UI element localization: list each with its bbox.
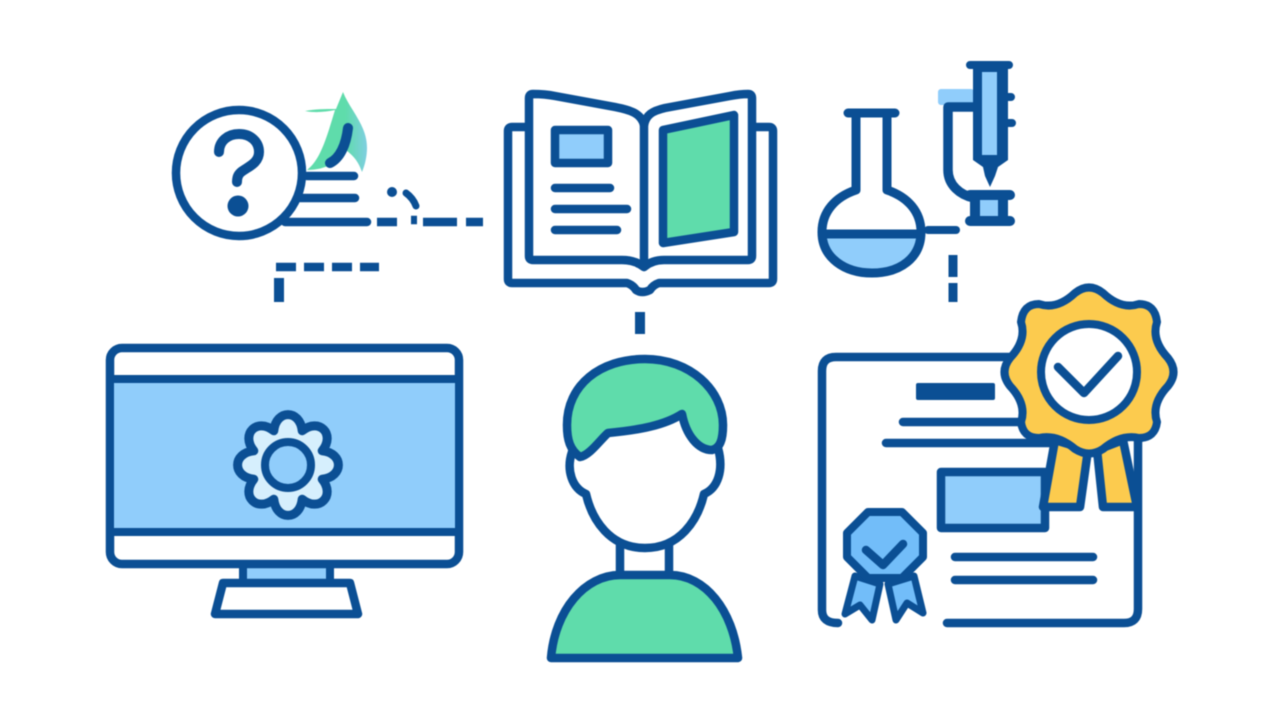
book pages [529,94,752,267]
icon: gear [238,415,338,515]
icon: flask [822,113,921,273]
icon: question circle [176,110,302,236]
small seal ribbons [845,576,923,620]
book spine [640,125,648,267]
small seal [847,512,923,578]
flask liquid [824,234,919,273]
icon: monitor with gear [110,348,459,614]
connector: book to person [635,312,645,334]
person hair [567,359,723,457]
large seal [1004,288,1174,454]
icon: person [551,359,738,658]
monitor screen [110,379,459,532]
icon: microscope [938,65,1012,221]
microscope tube [973,65,1008,187]
certificate text lines [886,422,1093,580]
icon: green leaf arrow [305,92,367,172]
microscope top cap and knobs [970,65,1012,123]
person neck [620,540,669,576]
monitor base [215,583,358,614]
connector: dashed path to monitor [276,267,379,302]
microscope base [975,195,1003,221]
person face [570,448,720,548]
icon: open book [508,94,773,292]
person shoulders [551,575,738,658]
microscope light bar [938,89,974,105]
book picture left [555,130,608,163]
flask outline [822,113,921,273]
book back cover [508,127,773,292]
connector: dashed path to book [377,187,483,222]
book text lines [555,188,627,230]
microscope arm [948,107,974,198]
connector: flask to certificate [928,230,956,302]
certificate blue box [941,472,1045,528]
icon: question with lines and leaf [176,92,367,236]
certificate title bar [916,383,995,400]
icon: certificate [822,288,1174,623]
text lines beside the circle [285,176,367,222]
monitor frame [110,348,459,564]
large seal ribbons [1043,440,1137,507]
book green panel [663,115,734,243]
monitor stand [243,564,330,584]
certificate frame [822,357,1138,623]
